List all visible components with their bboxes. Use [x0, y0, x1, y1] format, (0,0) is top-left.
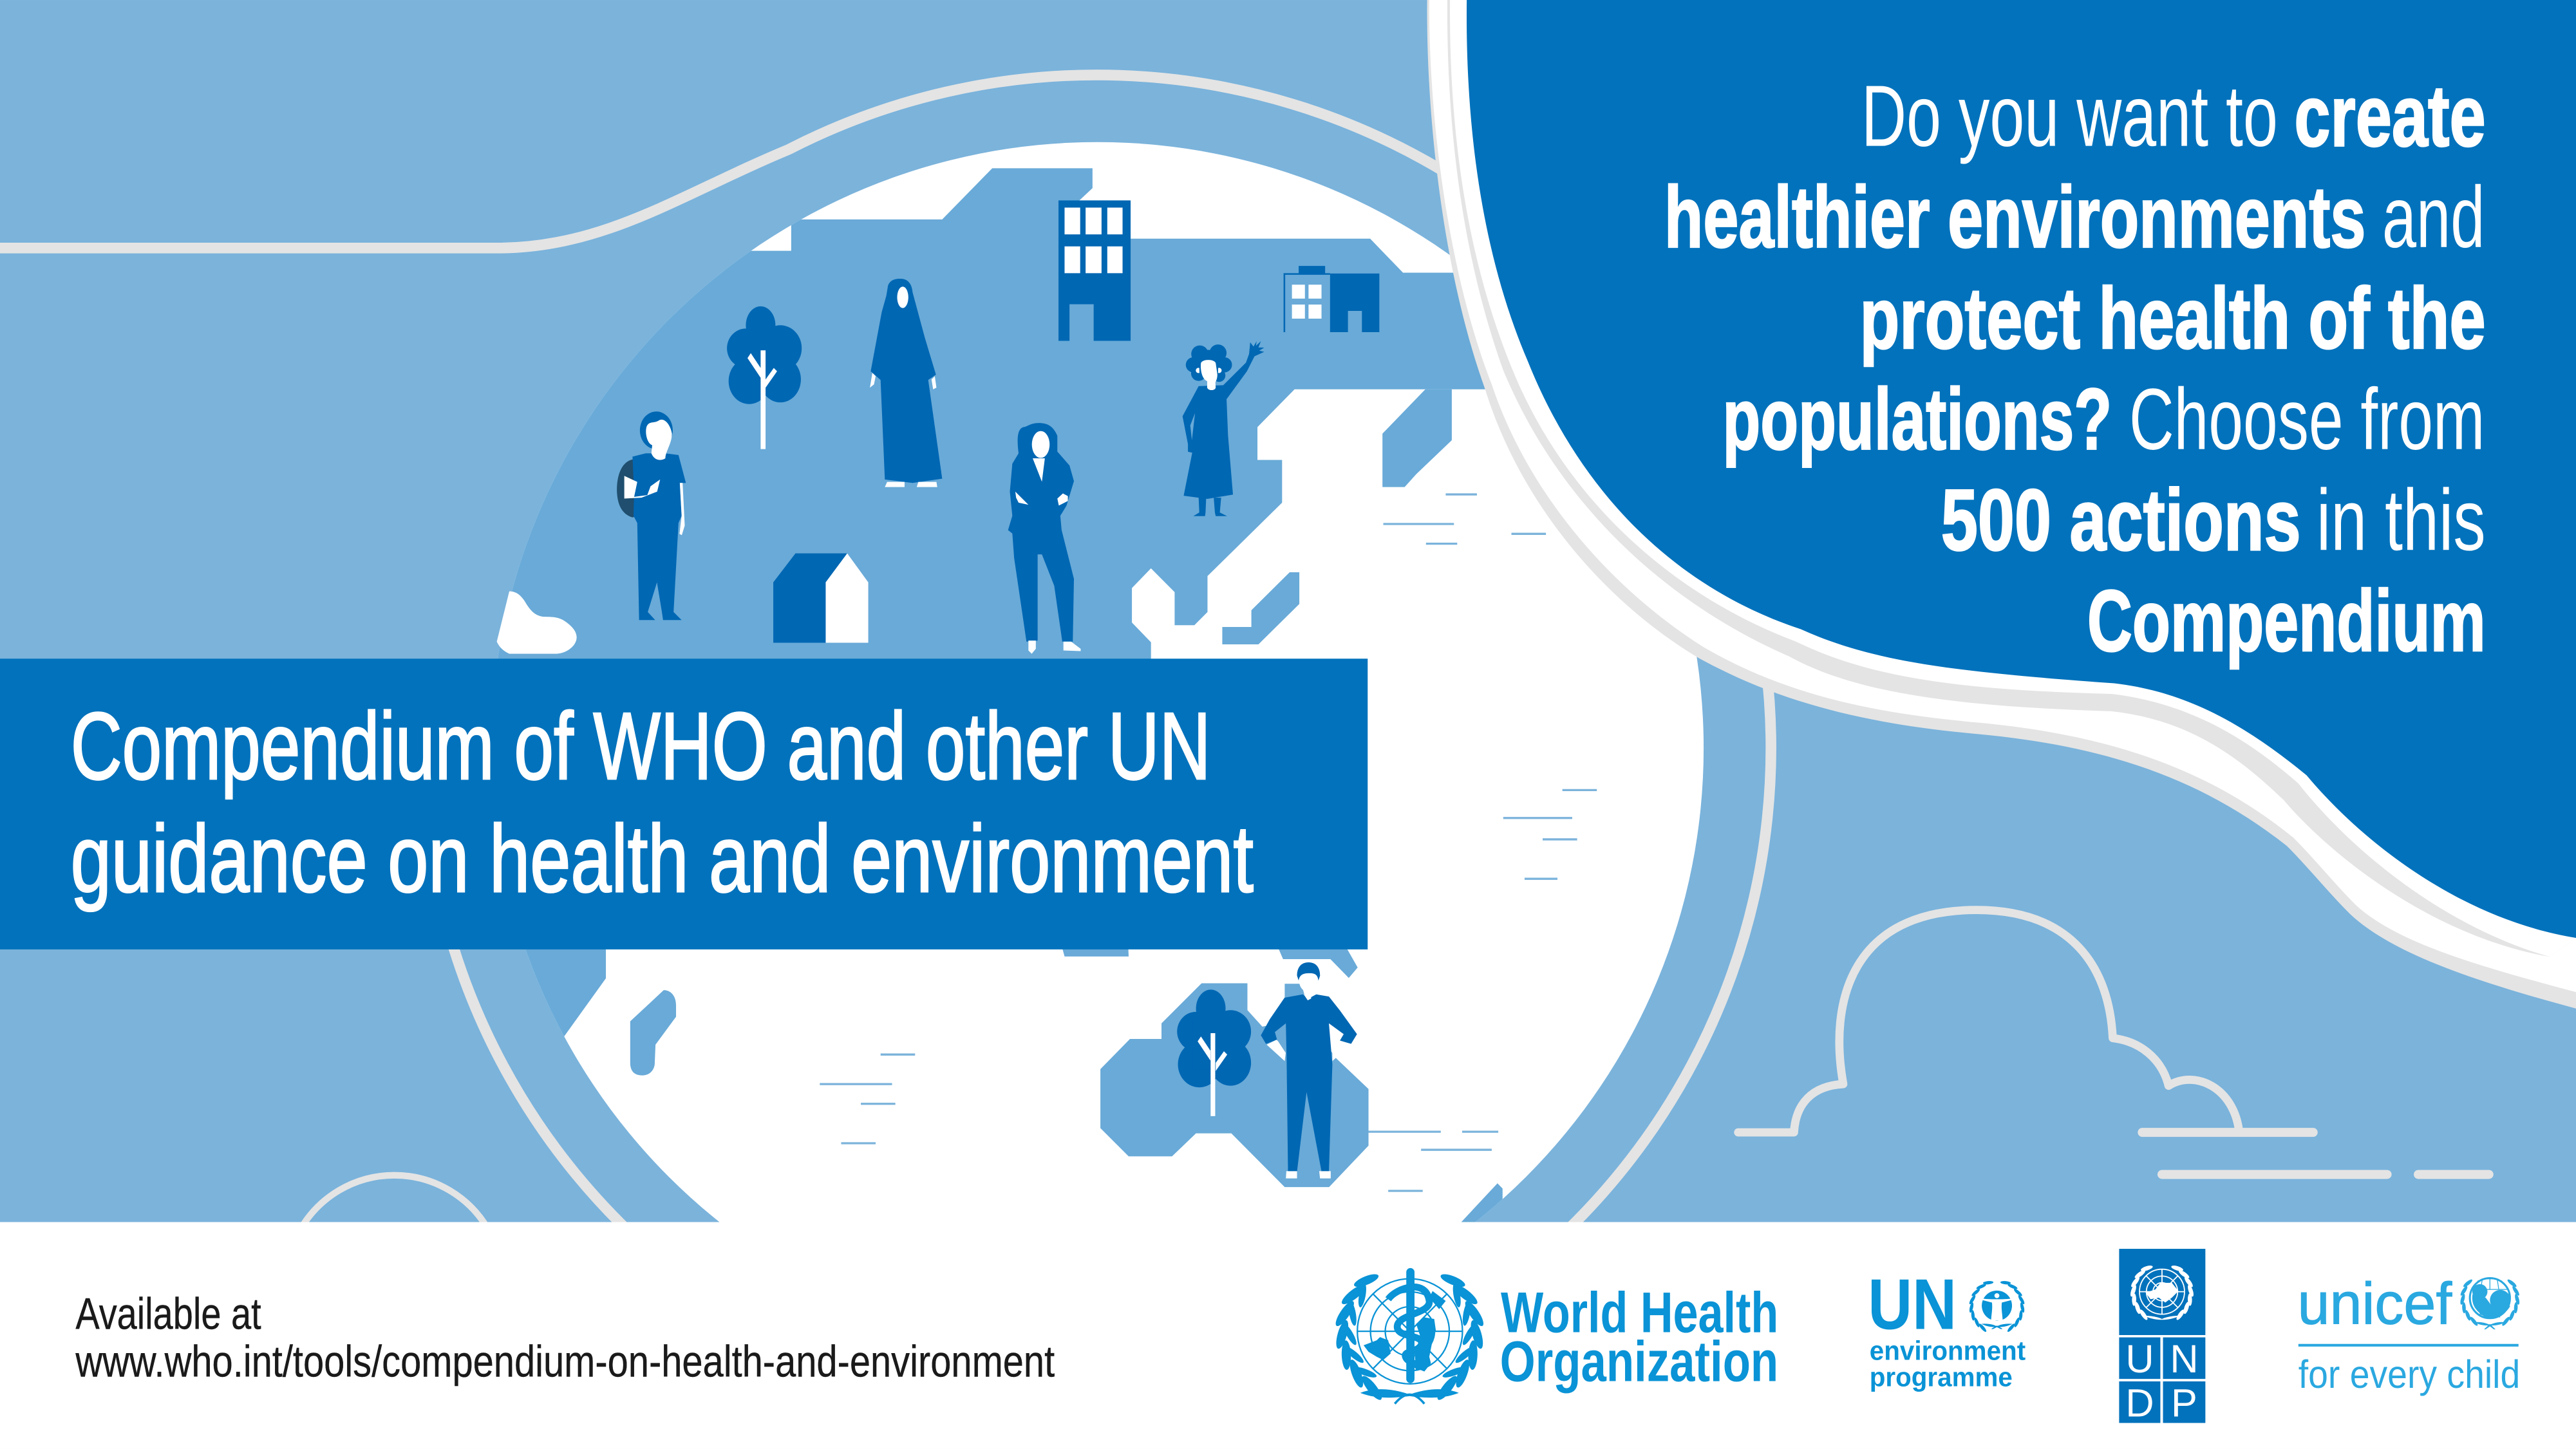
icon: small building — [1284, 266, 1379, 332]
logo: UNDP — [2119, 1249, 2205, 1425]
panel: swoosh bands and question panel — [1427, 0, 2576, 1009]
ocean dashes — [820, 494, 1597, 1191]
UNDP letters: P — [2171, 1381, 2197, 1425]
question text: and — [2382, 169, 2485, 266]
panel: globe — [497, 142, 1704, 1222]
title text: guidance on health and environment — [71, 806, 1254, 912]
person: man with hands on hips — [1261, 962, 1357, 1179]
icon: house — [773, 554, 869, 642]
question text: Do you want to — [1861, 68, 2278, 165]
for every child text: for every child — [2299, 1352, 2520, 1396]
icon: tree north — [727, 306, 802, 449]
person: woman in hijab — [870, 279, 942, 487]
person: man with backpack — [617, 411, 686, 620]
white band — [1429, 0, 2576, 992]
title banner — [0, 659, 1368, 949]
UNDP letters: N — [2170, 1337, 2199, 1381]
cloud outline — [1738, 910, 2239, 1132]
inner white band — [1450, 0, 2576, 957]
icon: UN emblem white — [2129, 1264, 2195, 1321]
availability text — [75, 1289, 1055, 1386]
environment programme text: environment — [1870, 1335, 2026, 1365]
logo: World Health Organization — [1333, 1268, 1778, 1404]
UNDP letter cells — [2119, 1338, 2205, 1423]
small cloud arc bottom left — [299, 1175, 489, 1232]
question text: create — [2294, 68, 2486, 165]
question text: populations? — [1722, 371, 2112, 468]
WHO wordmark: World Health — [1501, 1280, 1778, 1344]
title text — [71, 693, 1254, 912]
UNDP letters — [2125, 1337, 2199, 1425]
UNDP letters: U — [2125, 1337, 2154, 1381]
inner grey band — [1447, 0, 2576, 957]
question text: 500 actions — [1941, 471, 2301, 568]
icon: unicef emblem — [2459, 1278, 2521, 1329]
outer grey band — [1427, 0, 2576, 1009]
environment programme text — [1870, 1335, 2026, 1392]
lower right ring line — [1566, 667, 1771, 1232]
title text: Compendium of WHO and other UN — [71, 693, 1211, 799]
globe disc — [491, 142, 1704, 1354]
icon: tree south — [1177, 989, 1251, 1116]
WHO wordmark — [1500, 1280, 1778, 1393]
unicef divider — [2299, 1345, 2519, 1346]
blue question panel — [1467, 0, 2576, 938]
icon: UNEP emblem — [1968, 1280, 2026, 1332]
UNDP letters: D — [2125, 1381, 2154, 1425]
land masses — [476, 168, 1503, 1226]
footer band — [0, 1222, 2576, 1449]
WHO wordmark: Organization — [1500, 1329, 1778, 1393]
logo: unicef — [2297, 1271, 2521, 1396]
environment programme text: programme — [1870, 1361, 2013, 1392]
unicef wordmark: unicef — [2297, 1271, 2452, 1337]
person: woman with crossed arms — [1008, 423, 1080, 654]
question text — [1664, 68, 2486, 669]
availability text: Available at — [75, 1289, 261, 1338]
lower left ring line — [450, 936, 629, 1232]
top ring line — [0, 75, 1445, 248]
cloud base lines — [2142, 1132, 2489, 1174]
icon: WHO emblem — [1333, 1268, 1487, 1404]
icon: tall building — [1058, 200, 1131, 341]
availability text: www.who.int/tools/compendium-on-health-and-environment — [75, 1336, 1055, 1386]
person: waving woman — [1183, 341, 1264, 516]
white blob — [497, 592, 577, 654]
logo: UN environment programme — [1868, 1264, 2026, 1392]
UNDP top panel — [2119, 1249, 2205, 1335]
UN wordmark: UN — [1868, 1264, 1957, 1344]
question text: in this — [2317, 471, 2486, 568]
